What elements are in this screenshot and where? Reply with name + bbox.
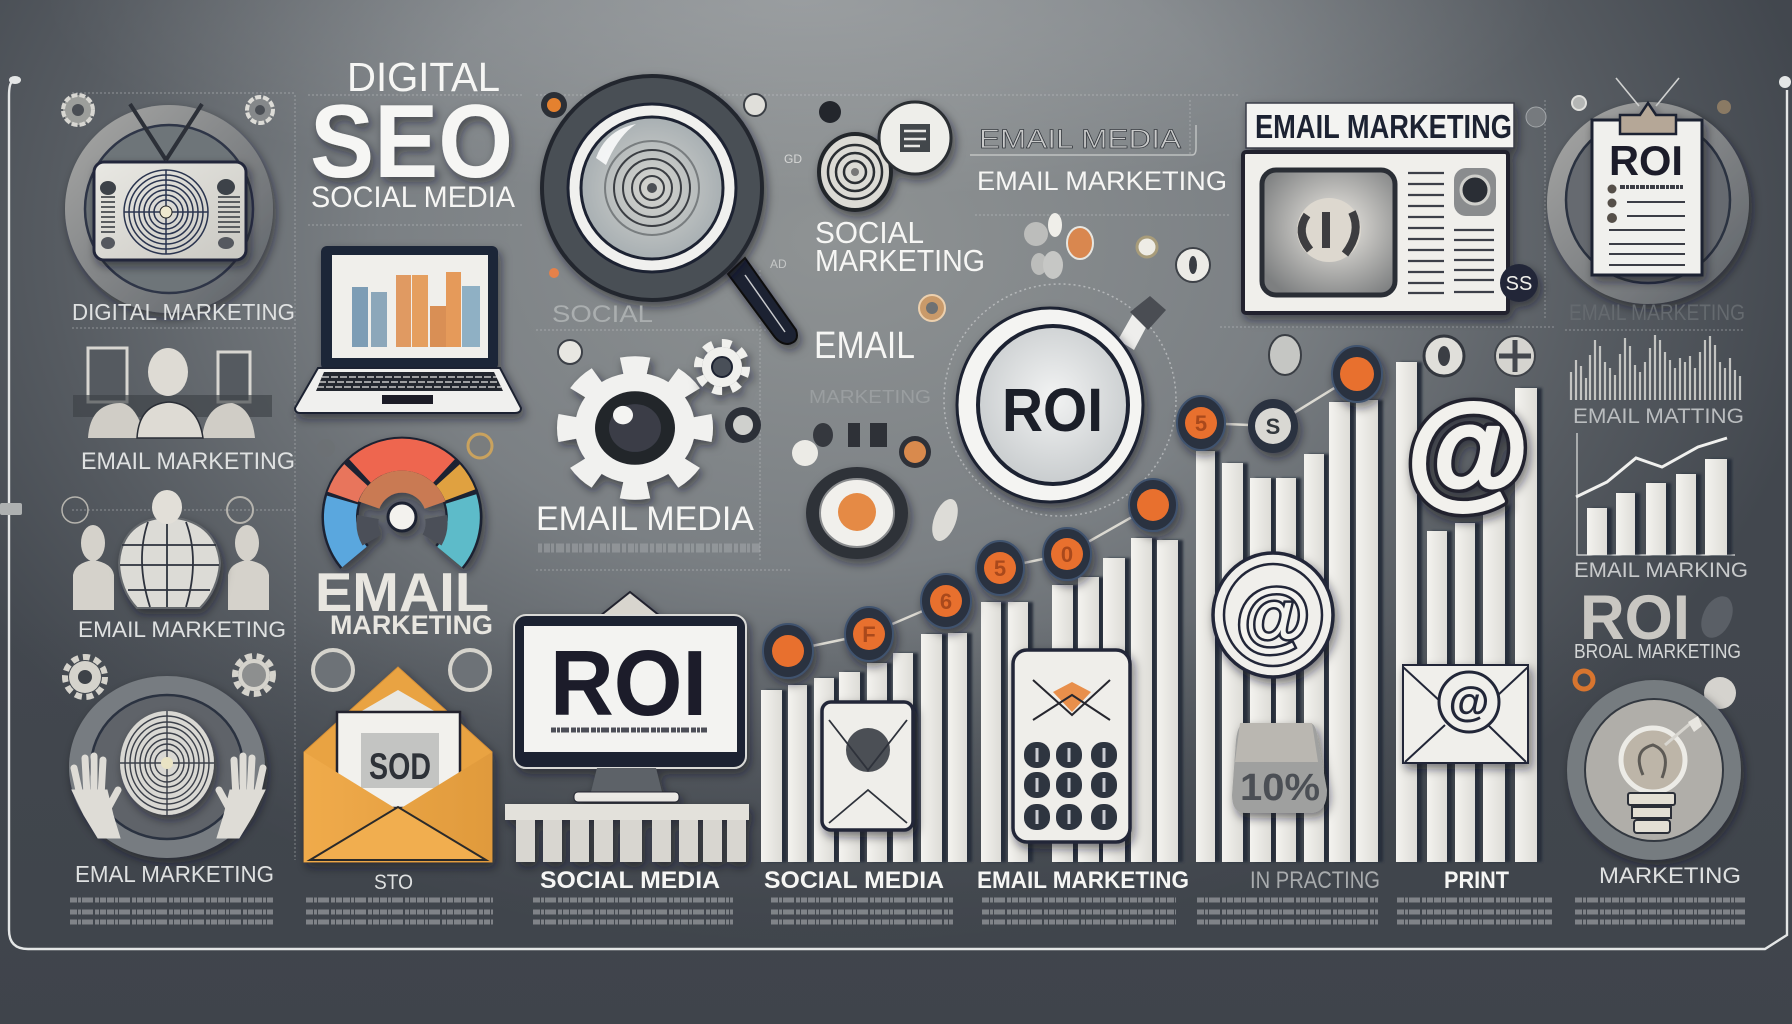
knob [1454, 168, 1496, 216]
base [295, 368, 521, 413]
tv ring [65, 105, 273, 313]
label: sto: STO [374, 871, 413, 894]
icon: big gear [555, 354, 715, 502]
node 3 [921, 574, 971, 628]
heading: email marketing [315, 561, 493, 640]
tv header [1246, 103, 1514, 148]
label: digital marketing: DIGITAL MARKETING [72, 299, 295, 325]
caption lines: column 1 [70, 900, 273, 922]
target rings [605, 141, 699, 235]
icon: people with windows [73, 348, 272, 438]
chart bars [352, 272, 480, 347]
label: email media: EMAIL MEDIA [536, 500, 754, 538]
label: email marketing 2: EMAIL MARKETING [78, 617, 286, 642]
lens handle [1118, 310, 1150, 350]
axis [1577, 433, 1735, 555]
small badges around magnifier: GD [784, 152, 802, 166]
label: in practing: IN PRACTING [1250, 867, 1380, 894]
icon: roi monitor: ROI [550, 631, 707, 735]
keyboard [316, 372, 503, 391]
antenna [1616, 78, 1679, 106]
node 2: F [862, 622, 876, 647]
icon: magnifying glass [542, 76, 797, 344]
node 3: 6 [940, 589, 952, 614]
icon: shelf [505, 804, 749, 862]
node 8 [1248, 399, 1298, 453]
fingerprint disc [120, 711, 214, 815]
icon: small gears [65, 656, 273, 697]
icon: big at sign: @ [1407, 380, 1529, 519]
label: email marketing 4: EMAIL MARKETING [977, 867, 1189, 894]
envelope mark [1053, 682, 1091, 712]
label: email matting: EMAIL MATTING [1573, 405, 1744, 428]
icon: phone with envelope [822, 702, 913, 830]
label: email marking: EMAIL MARKING [1574, 559, 1748, 582]
label: email marketing 3: EMAIL MARKETING [977, 166, 1227, 196]
antenna [130, 104, 202, 160]
outer body [542, 76, 762, 300]
node 1 [763, 624, 813, 678]
icon: email at envelope: @ [1449, 678, 1489, 725]
trend line [1576, 438, 1727, 497]
roi text: ROI [1002, 376, 1103, 444]
icon: news tv panel [1243, 103, 1538, 313]
icon: envelope round badges [313, 650, 490, 690]
icon: email at envelope [1403, 665, 1528, 763]
ring [69, 676, 265, 858]
node 4: 5 [994, 556, 1006, 581]
caption lines: column 3 [533, 900, 733, 922]
icon: roi lens [944, 284, 1176, 516]
icon: big at sign: @ [1407, 380, 1529, 519]
label: faded email marketing: EMAIL MARKETING [1569, 300, 1745, 325]
icon: white tag [927, 496, 963, 544]
heading: digital seo social media [310, 54, 515, 214]
rings [1567, 680, 1741, 860]
dotted halo [944, 284, 1176, 516]
label: print: PRINT [1444, 867, 1509, 894]
screen [1262, 170, 1395, 295]
trend connector lines [788, 374, 1357, 651]
bars [1587, 459, 1727, 555]
handle [714, 244, 797, 344]
node 6 [1129, 479, 1177, 531]
label: broal marketing: BROAL MARKETING [1574, 641, 1741, 663]
sheet: ROI [1609, 137, 1683, 184]
icon cluster: dark shapes [792, 423, 931, 468]
caption: under email media [538, 544, 761, 552]
bottom labels [764, 863, 1741, 894]
hands [72, 756, 265, 838]
dotted grid [72, 93, 1745, 860]
header text: EMAIL MARKETING [1255, 108, 1512, 145]
icon: social target and badge [819, 101, 951, 210]
label: marketing: MARKETING [1599, 863, 1741, 888]
gear side badges [558, 340, 761, 443]
trend nodes [763, 346, 1382, 678]
label: social media 2: SOCIAL MEDIA [764, 867, 944, 894]
label: social marketing: SOCIAL [815, 215, 924, 250]
screen [321, 246, 498, 370]
label: social media 1: SOCIAL MEDIA [540, 867, 720, 894]
icon: percent block [1232, 723, 1327, 813]
icon: globe with people [62, 490, 269, 610]
icon: orange envelope [304, 667, 492, 862]
icon row: top bar badges [1269, 335, 1535, 376]
bulb [1621, 716, 1702, 833]
icon: gauge [340, 455, 464, 557]
node 8: S [1266, 414, 1280, 439]
text column 1 [1408, 173, 1444, 293]
label: faded social: SOCIAL [552, 301, 653, 328]
tv body [1243, 152, 1508, 313]
digital: DIGITAL [347, 54, 500, 100]
icon: at-sign badge: @ [1236, 574, 1310, 659]
icon: calculator phone [1013, 650, 1130, 842]
icon: tv dial panel [63, 95, 273, 313]
badge: SS [1506, 273, 1532, 295]
ring [1547, 102, 1749, 304]
icon: orange dial [806, 467, 908, 559]
icon: laptop bar chart [295, 246, 521, 413]
sheet [1592, 103, 1702, 275]
node 9 [1332, 346, 1382, 402]
small badges around magnifier: AD [770, 257, 787, 271]
icon: roi monitor [514, 592, 746, 802]
faint badge [1526, 107, 1546, 127]
bar chart: social media [761, 633, 967, 862]
seo: SEO [310, 84, 513, 200]
node 5 [1043, 528, 1091, 580]
icon: orange envelope: SOD [369, 746, 431, 787]
label: social marketing [815, 215, 985, 278]
label: emal marketing: EMAL MARKETING [75, 861, 274, 887]
caption lines: column 2 [306, 900, 493, 922]
node 7: 5 [1195, 411, 1207, 436]
small badges around magnifier [541, 92, 802, 278]
chart: sparkline bars [1571, 335, 1740, 400]
social media: SOCIAL MEDIA [311, 181, 515, 214]
letter [337, 712, 460, 808]
chart: bars with trend line [1576, 433, 1735, 555]
gauge side badges [317, 434, 492, 458]
bar chart: email marketing [981, 538, 1178, 862]
icon: fan with hands [69, 676, 265, 858]
bar chart: in practing [1196, 400, 1378, 862]
node 4 [976, 541, 1024, 595]
label: faded marketing: MARKETING [809, 387, 931, 407]
bar chart: print [1396, 362, 1537, 862]
badge [1500, 264, 1538, 302]
label: faded roi: ROI [1580, 583, 1690, 653]
icon: bulb target [1567, 671, 1741, 860]
label: embossed email media: EMAIL MEDIA [979, 124, 1181, 154]
icon: at-sign badge [1213, 553, 1333, 677]
marketing: MARKETING [330, 610, 493, 640]
node 7 [1177, 396, 1225, 450]
scattered icons [1024, 213, 1210, 282]
small icons [63, 95, 273, 125]
icon: roi clipboard [1547, 78, 1749, 304]
node 5: 0 [1061, 542, 1073, 567]
icon: orange ring [919, 295, 945, 321]
icon: percent block: 10% [1240, 767, 1320, 809]
icon: small gear [698, 343, 746, 391]
email: EMAIL [315, 561, 489, 623]
caption lines: columns 4 to 8 [771, 900, 1745, 922]
side badges [1575, 671, 1736, 709]
node 2 [845, 607, 893, 661]
text column 2 [1454, 230, 1494, 292]
label: social marketing: MARKETING [815, 243, 985, 278]
label: email: EMAIL [814, 325, 915, 367]
screen glyph [1297, 198, 1361, 262]
label: email marketing: EMAIL MARKETING [81, 448, 295, 475]
tv body [94, 162, 246, 260]
keypad [1024, 742, 1117, 830]
